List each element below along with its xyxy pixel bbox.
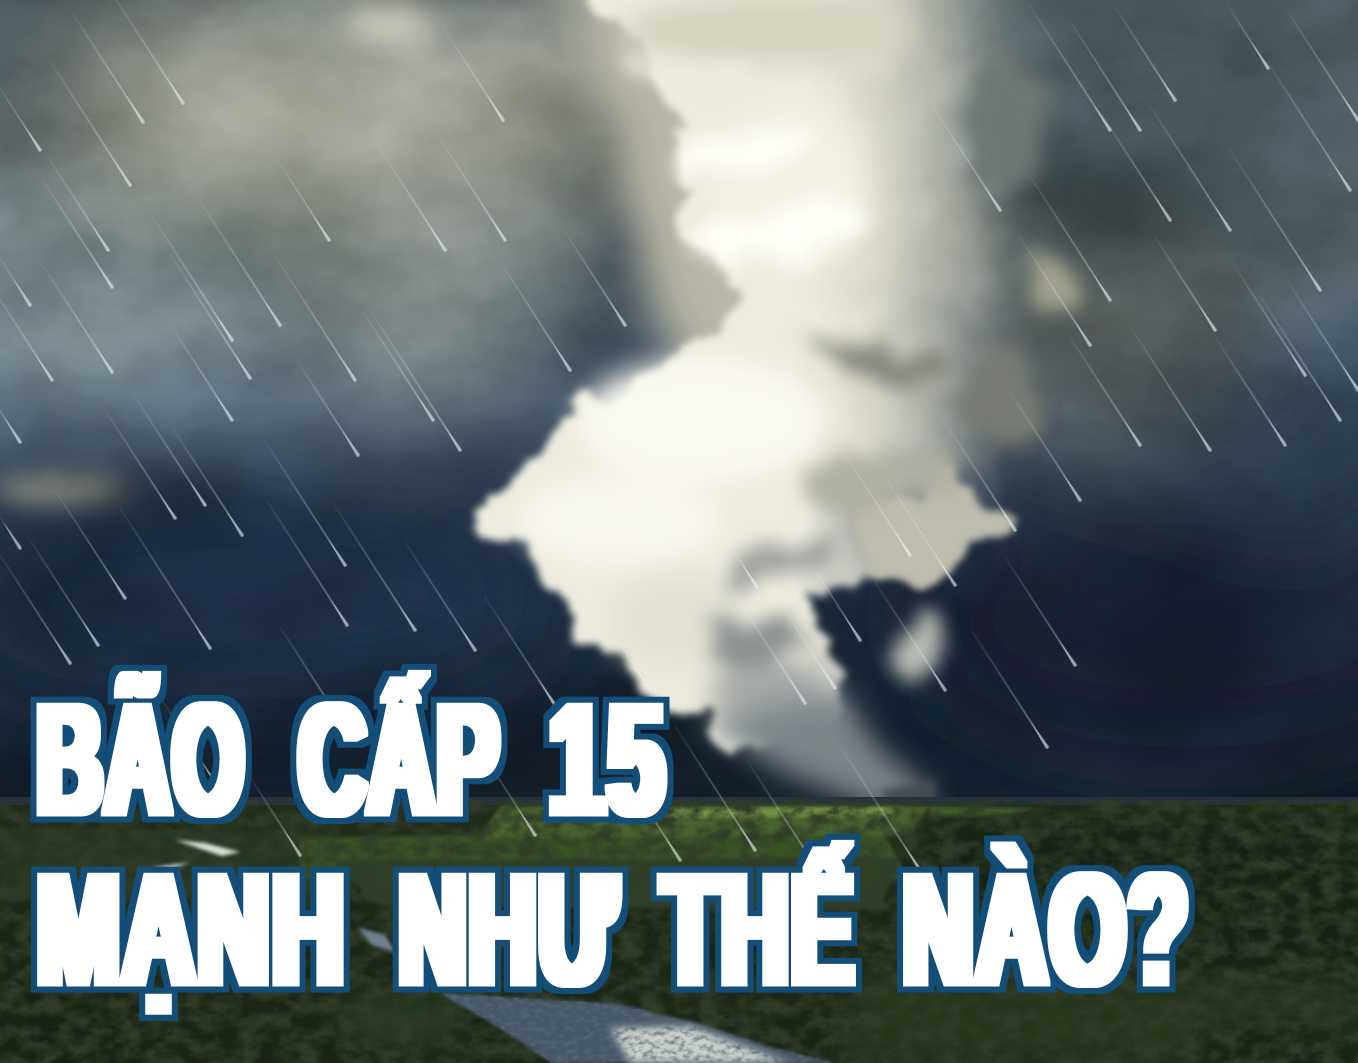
title line 2 [37,842,1191,1018]
title line 1: CẤP [299,672,501,848]
tornado cloud body [475,0,1074,845]
title line 2: THẾ [662,842,856,1018]
title [37,672,1191,1018]
river [150,840,835,1063]
landscape ground [0,797,1358,1063]
title line 2: NHƯ [399,842,619,1018]
title line 1: BÃO [37,672,246,848]
title line 1: 15 [549,672,667,848]
title line 2: MẠNH [37,842,347,1018]
title line 1 [37,672,667,848]
stormy sky background [0,0,1358,810]
title line 2: NÀO? [903,842,1191,1018]
cloud texture overlay [0,0,1358,800]
